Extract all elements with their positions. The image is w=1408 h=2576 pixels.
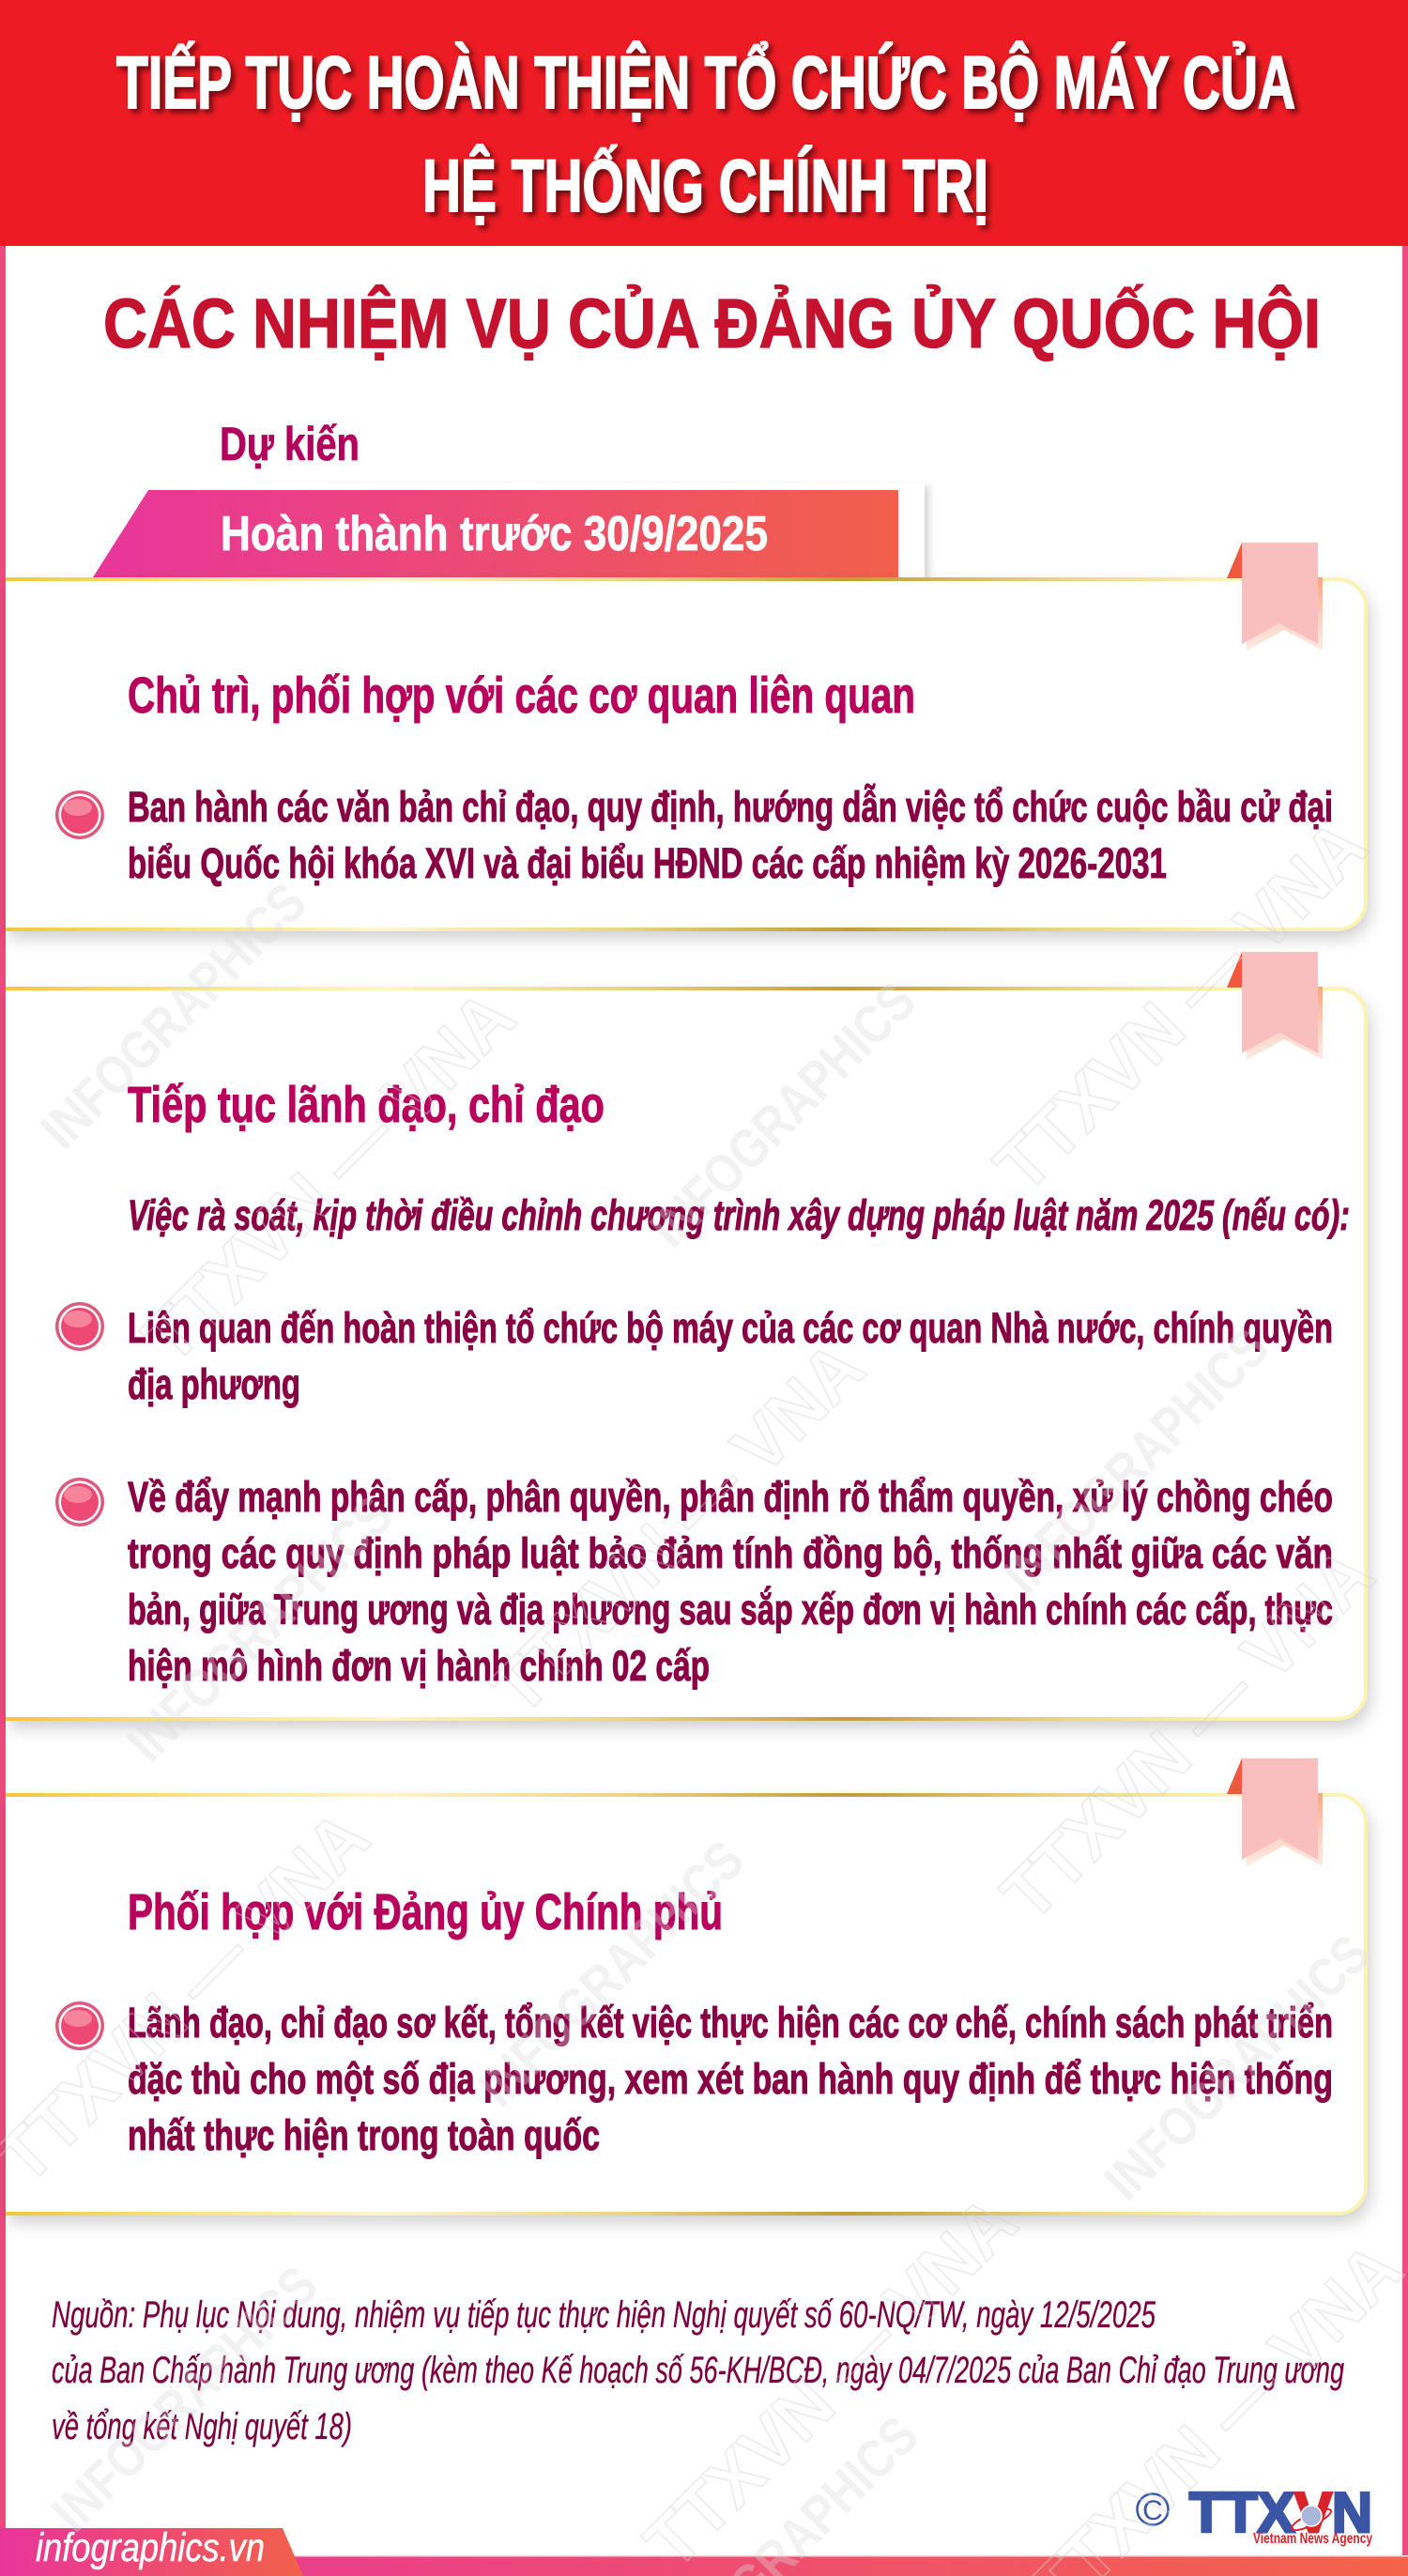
heading: Tiếp tục lãnh đạo, chỉ đạo [128,1077,605,1133]
logo: TTXVN: TTXVN [1189,2481,1372,2544]
text block: hiện mô hình đơn vị hành chính 02 cấp [128,1642,710,1690]
icon: bookmark [1227,543,1323,651]
panel: card 3 [6,1758,1366,2214]
text block: nhất thực hiện trong toàn quốc [128,2111,600,2159]
panel: card 2 [6,952,1366,1719]
source note: về tổng kết Nghị quyết 18) [52,2406,352,2447]
watermark pattern: TTXVN — VNA [629,2180,1033,2576]
deadline banner [93,483,925,577]
title: HỆ THỐNG CHÍNH TRỊ [422,144,988,227]
left page border [0,246,6,2576]
icon: bullet [55,1478,104,1526]
watermark pattern: TTXVN — VNA [127,974,530,1378]
watermark pattern: INFOGRAPHICS [467,1830,756,2118]
logo: TTXVN: Vietnam News Agency [1253,2531,1372,2547]
watermark pattern: TTXVN — VNA [986,1532,1389,1936]
icon: bookmark [1227,1758,1323,1866]
website tab: infographics.vn [36,2525,265,2570]
right page border [1402,246,1408,2576]
watermark pattern [0,804,1408,2576]
text block [128,1304,1333,1408]
watermark pattern: INFOGRAPHICS [115,1485,405,1773]
deadline banner: Hoàn thành trước 30/9/2025 [221,507,768,561]
text block [128,1999,1333,2159]
text block: địa phương [128,1360,300,1408]
text block [128,1473,1333,1690]
heading: Phối hợp với Đảng ủy Chính phủ [128,1884,723,1940]
watermark pattern: TTXVN — VNA [476,1326,880,1729]
heading: Chủ trì, phối hợp với các cơ quan liên quan [128,667,915,724]
icon: bullet [55,1302,104,1351]
icon: bookmark [1227,952,1323,1060]
icon: bullet [55,2001,104,2050]
watermark pattern: TTXVN — VNA [979,804,1383,1207]
watermark pattern: INFOGRAPHICS [29,872,318,1160]
title [116,40,1295,227]
icon: bullet [55,790,104,839]
watermark pattern: INFOGRAPHICS [638,971,927,1259]
footer band [0,2525,1408,2576]
panel: card 1 [6,543,1366,929]
logo: TTXVN: C [1142,2495,1163,2526]
watermark pattern: INFOGRAPHICS [991,1317,1280,1605]
source note [52,2294,1344,2447]
label: expected: Dự kiến [220,418,360,470]
text block [128,783,1333,887]
header band [0,0,1408,246]
watermark pattern: INFOGRAPHICS [40,2255,329,2543]
